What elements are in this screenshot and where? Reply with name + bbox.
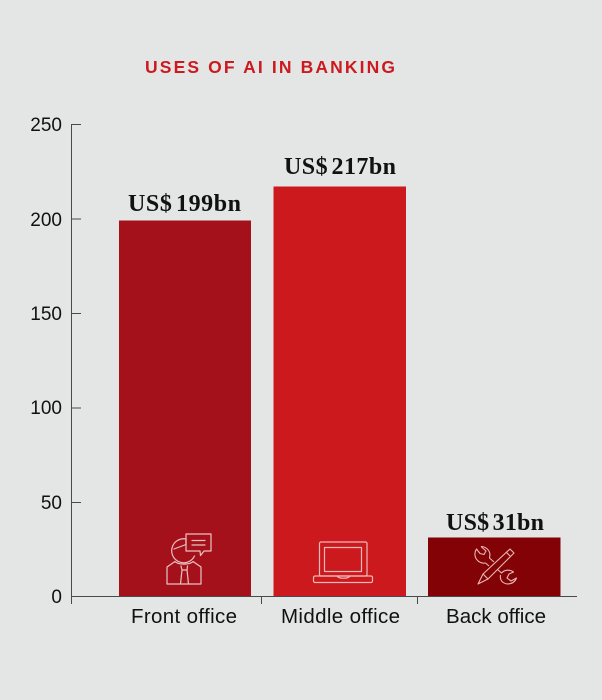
category labels (131, 605, 546, 628)
y axis labels: 0 (51, 587, 62, 608)
x axis (72, 596, 577, 604)
icon: crossed wrench and pencil (475, 546, 516, 584)
bar: middle office (274, 186, 406, 596)
y axis labels: 200 (30, 210, 62, 231)
value labels: US$ 31bn (446, 510, 544, 536)
value labels: US$ 199bn (128, 191, 241, 217)
y axis labels: 150 (30, 304, 62, 325)
icon: person with speech bubble (167, 534, 211, 584)
y axis labels (30, 115, 62, 608)
y axis labels: 250 (30, 115, 62, 136)
bar: back office (428, 538, 560, 596)
y axis labels: 50 (41, 493, 62, 514)
category labels: Back office (446, 605, 546, 628)
title: USES OF AI IN BANKING (145, 57, 395, 77)
category labels: Front office (131, 605, 237, 628)
bar: front office (119, 220, 251, 596)
value labels (128, 154, 544, 536)
icon: laptop (314, 542, 372, 582)
category labels: Middle office (281, 605, 400, 628)
y axis (72, 124, 81, 596)
y axis labels: 100 (30, 398, 62, 419)
value labels: US$ 217bn (284, 154, 396, 180)
